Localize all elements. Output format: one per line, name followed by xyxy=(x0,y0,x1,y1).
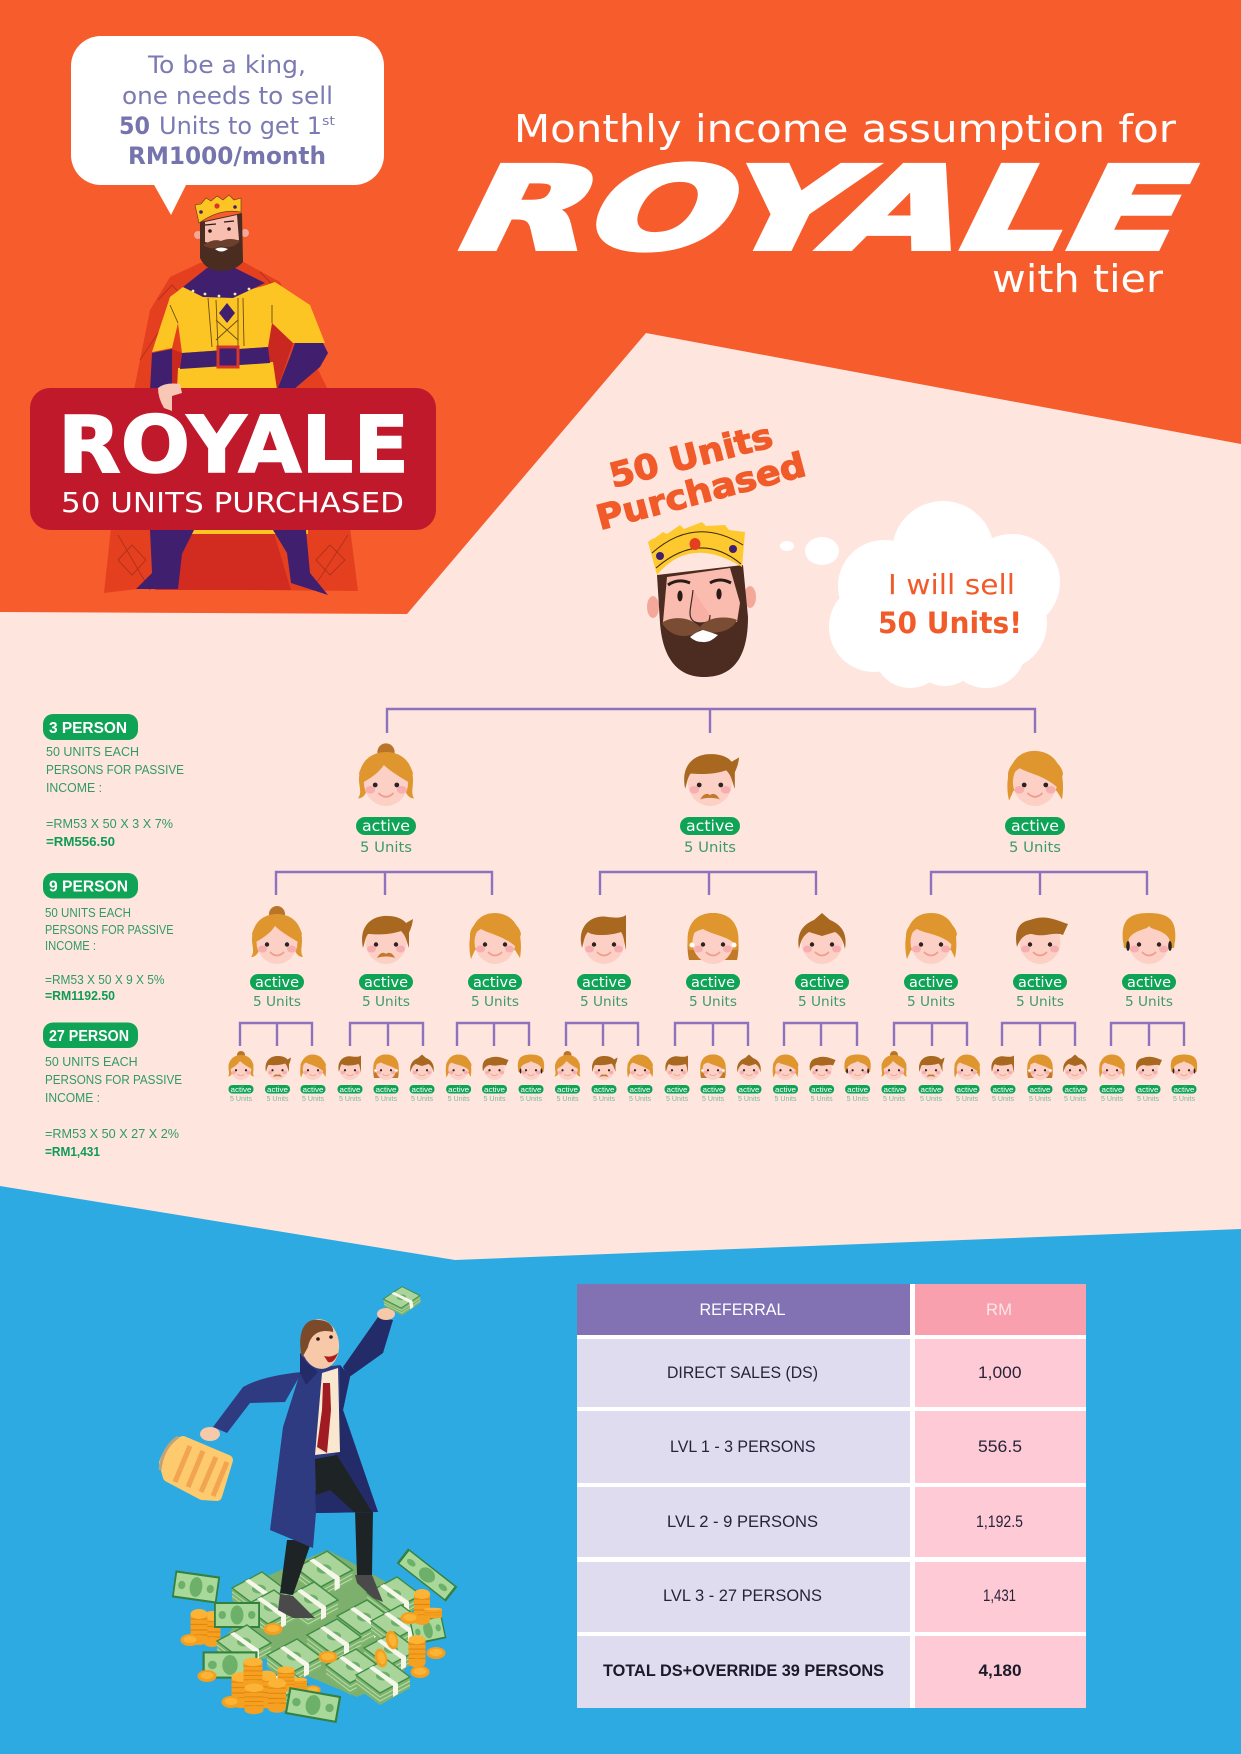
table header: REFERRAL xyxy=(700,1300,786,1319)
person: 5 Units xyxy=(702,1096,724,1103)
person xyxy=(250,906,304,1010)
speech bubble: to be a king: To be a king, xyxy=(147,51,306,79)
illustration: businessman with suitcase xyxy=(160,1285,423,1618)
person xyxy=(1099,1054,1125,1103)
person xyxy=(228,1051,254,1103)
speech bubble: to be a king: Units to get 1 xyxy=(159,112,322,140)
table row: level 3 xyxy=(577,1562,1086,1632)
person: 5 Units xyxy=(666,1096,688,1103)
person: active xyxy=(666,1085,688,1094)
panel: 3 person calculation: =RM53 X 50 X 3 X 7% xyxy=(46,817,173,831)
person: 5 Units xyxy=(484,1096,506,1103)
person: active xyxy=(775,1085,796,1094)
panel: 3 person calculation: 50 UNITS EACH xyxy=(46,745,139,759)
speech bubble: to be a king: 50 xyxy=(119,112,150,140)
person: 5 Units xyxy=(360,840,412,856)
person: active xyxy=(364,975,408,991)
tier 1 people xyxy=(356,743,1065,856)
table row: level 3: 1,431 xyxy=(983,1587,1016,1605)
table row: level 3: LVL 3 - 27 PERSONS xyxy=(663,1587,822,1605)
person: 5 Units xyxy=(1101,1096,1123,1103)
connector lines: tree xyxy=(240,709,1184,1046)
table row: total xyxy=(577,1636,1086,1708)
speech bubble: to be a king: st xyxy=(322,114,335,128)
person: active xyxy=(340,1085,360,1094)
thought cloud: i will sell 50 units xyxy=(780,501,1060,688)
red label: royale 50 units purchased xyxy=(30,388,436,530)
person: active xyxy=(738,1085,760,1094)
person: active xyxy=(811,1085,832,1094)
person: 5 Units xyxy=(448,1096,470,1103)
person: active xyxy=(1018,975,1062,991)
person: 5 Units xyxy=(1173,1096,1195,1103)
speech bubble: to be a king: RM1000/month xyxy=(128,142,326,170)
panel: 9 person calculation: 50 UNITS EACH xyxy=(45,906,131,920)
person xyxy=(338,1056,362,1103)
speech bubble: to be a king xyxy=(71,36,384,215)
person: 5 Units xyxy=(520,1096,542,1103)
title: with tier: with tier xyxy=(992,257,1163,301)
person: active xyxy=(255,975,299,991)
table row: direct sales xyxy=(577,1339,1086,1407)
person: active xyxy=(362,817,410,835)
person: 5 Units xyxy=(920,1096,942,1103)
person xyxy=(1171,1054,1197,1103)
table row: level 2: LVL 2 - 9 PERSONS xyxy=(667,1513,818,1531)
table row: level 2 xyxy=(577,1487,1086,1557)
table header xyxy=(577,1284,1086,1335)
panel: 27 person calculation: 27 PERSON xyxy=(49,1028,129,1045)
person: active xyxy=(473,975,517,991)
panel: 27 person calculation: =RM1,431 xyxy=(45,1145,100,1159)
red label: royale 50 units purchased: ROYALE xyxy=(58,401,409,491)
person: active xyxy=(557,1085,578,1094)
panel: 3 person calculation: 3 PERSON xyxy=(49,720,127,737)
person xyxy=(773,1054,798,1103)
table row: direct sales: DIRECT SALES (DS) xyxy=(667,1364,818,1382)
person: 5 Units xyxy=(593,1096,615,1103)
person: 5 Units xyxy=(956,1096,978,1103)
person xyxy=(300,1054,326,1103)
person xyxy=(736,1054,762,1103)
panel: 27 person calculation: PERSONS FOR PASSIVE xyxy=(45,1073,182,1087)
rotated heading: 50 units purchased: Purchased xyxy=(592,445,810,539)
person xyxy=(918,1056,944,1103)
panel: 9 person calculation: =RM53 X 50 X 9 X 5% xyxy=(45,973,164,987)
person: active xyxy=(1102,1085,1122,1094)
thought cloud: i will sell 50 units: I will sell xyxy=(888,568,1015,601)
person: 5 Units xyxy=(580,994,628,1010)
person: 5 Units xyxy=(798,994,846,1010)
person: active xyxy=(594,1085,614,1094)
person: 5 Units xyxy=(883,1096,905,1103)
person xyxy=(795,913,849,1010)
person xyxy=(680,754,740,856)
speech bubble: to be a king: one needs to sell xyxy=(122,82,333,110)
panel: 27 person calculation: =RM53 X 50 X 27 X 2% xyxy=(45,1127,179,1141)
panel: 9 person calculation: 9 PERSON xyxy=(49,878,128,896)
person: 5 Units xyxy=(811,1096,833,1103)
person: 5 Units xyxy=(1125,994,1173,1010)
person: active xyxy=(412,1085,432,1094)
person: 5 Units xyxy=(1137,1096,1159,1103)
person: active xyxy=(956,1085,978,1094)
tier 2 people xyxy=(250,906,1176,1010)
person: active xyxy=(1174,1085,1194,1094)
person xyxy=(410,1054,434,1103)
person xyxy=(700,1054,726,1103)
person: 5 Units xyxy=(847,1096,869,1103)
person: 5 Units xyxy=(738,1096,760,1103)
table row: level 1: LVL 1 - 3 PERSONS xyxy=(670,1438,816,1456)
person: 5 Units xyxy=(302,1096,324,1103)
person: active xyxy=(582,975,626,991)
person xyxy=(1062,1054,1088,1103)
person xyxy=(373,1054,399,1103)
panel: 27 person calculation: 50 UNITS EACH xyxy=(45,1055,138,1069)
panel: 3 person calculation: =RM556.50 xyxy=(46,835,115,849)
person xyxy=(664,1056,690,1103)
person xyxy=(881,1051,907,1103)
title: royale logo: ROYALE xyxy=(434,144,1220,276)
person: active xyxy=(484,1085,505,1094)
person: active xyxy=(302,1085,324,1094)
background: blue bottom section xyxy=(0,1186,1241,1754)
person: active xyxy=(1011,817,1059,835)
person: 5 Units xyxy=(557,1096,579,1103)
table row: total: TOTAL DS+OVERRIDE 39 PERSONS xyxy=(603,1662,884,1680)
person xyxy=(577,915,631,1010)
person: 5 Units xyxy=(253,994,301,1010)
person: 5 Units xyxy=(375,1096,397,1103)
person xyxy=(468,913,522,1010)
illustration: king standing xyxy=(104,195,358,595)
table: referral income xyxy=(577,1284,1086,1708)
person: active xyxy=(267,1085,288,1094)
person xyxy=(627,1054,653,1103)
person: active xyxy=(1064,1085,1086,1094)
panel: 27 person calculation: INCOME : xyxy=(45,1091,100,1105)
panel: 3 person calculation: PERSONS FOR PASSIVE xyxy=(46,763,184,777)
person: 5 Units xyxy=(992,1096,1014,1103)
person xyxy=(356,743,416,856)
person: 5 Units xyxy=(362,994,410,1010)
red label: royale 50 units purchased: 50 UNITS PURCHASED xyxy=(61,487,404,519)
person xyxy=(554,1051,580,1103)
person: active xyxy=(630,1085,650,1094)
person: active xyxy=(376,1085,396,1094)
person: active xyxy=(992,1085,1014,1094)
person: 5 Units xyxy=(1064,1096,1086,1103)
person: active xyxy=(1138,1085,1158,1094)
table row: direct sales: 1,000 xyxy=(978,1364,1022,1382)
person xyxy=(1027,1054,1053,1103)
person: 5 Units xyxy=(1016,994,1064,1010)
panel: 9 person calculation: =RM1192.50 xyxy=(45,989,115,1003)
person: active xyxy=(909,975,953,991)
person xyxy=(1005,751,1065,856)
illustration: money pile xyxy=(173,1550,456,1722)
person: active xyxy=(847,1085,868,1094)
person: 5 Units xyxy=(775,1096,797,1103)
person xyxy=(446,1054,472,1103)
background: pale pink middle section xyxy=(0,333,1241,1300)
person xyxy=(482,1057,508,1103)
person: 5 Units xyxy=(411,1096,433,1103)
person: 5 Units xyxy=(689,994,737,1010)
person: active xyxy=(800,975,844,991)
person xyxy=(1013,917,1068,1010)
person: active xyxy=(448,1085,469,1094)
person xyxy=(904,913,958,1010)
person: 5 Units xyxy=(230,1096,252,1103)
person xyxy=(518,1054,544,1103)
person xyxy=(1136,1057,1162,1103)
panel: 27 person calculation xyxy=(43,1022,182,1159)
person xyxy=(1122,913,1176,1010)
background: top orange section xyxy=(0,0,1241,640)
panel: 9 person calculation: INCOME : xyxy=(45,939,96,953)
table row: level 1: 556.5 xyxy=(978,1438,1022,1456)
person: active xyxy=(920,1085,942,1094)
person: active xyxy=(230,1085,252,1094)
person xyxy=(592,1056,618,1103)
person: 5 Units xyxy=(1029,1096,1051,1103)
person: active xyxy=(1030,1085,1050,1094)
panel: 3 person calculation xyxy=(43,714,184,849)
person: active xyxy=(686,817,734,835)
table row: level 1 xyxy=(577,1411,1086,1483)
person: 5 Units xyxy=(471,994,519,1010)
person: 5 Units xyxy=(629,1096,651,1103)
thought cloud: i will sell 50 units: 50 Units! xyxy=(878,606,1022,640)
person: 5 Units xyxy=(1009,840,1061,856)
person xyxy=(990,1056,1016,1103)
panel: 9 person calculation xyxy=(43,873,174,1003)
title: monthly income assumption: Monthly income assumption for xyxy=(514,107,1176,151)
icon: king hand over label xyxy=(158,384,182,411)
person: 5 Units xyxy=(267,1096,289,1103)
person xyxy=(809,1057,836,1103)
panel: 3 person calculation: INCOME : xyxy=(46,781,102,795)
illustration: king head with crown xyxy=(647,522,756,677)
person xyxy=(686,913,740,1010)
person: active xyxy=(884,1085,904,1094)
table row: level 2: 1,192.5 xyxy=(976,1513,1023,1531)
panel: 9 person calculation: PERSONS FOR PASSIVE xyxy=(45,923,174,937)
table row: total: 4,180 xyxy=(978,1662,1022,1680)
person: active xyxy=(702,1085,724,1094)
person: 5 Units xyxy=(339,1096,361,1103)
table header: RM xyxy=(986,1300,1012,1319)
person: active xyxy=(691,975,735,991)
tier 3 people xyxy=(228,1051,1197,1103)
person: active xyxy=(520,1085,542,1094)
person xyxy=(954,1054,980,1103)
person: 5 Units xyxy=(684,840,736,856)
person: active xyxy=(1127,975,1171,991)
rotated heading: 50 units purchased: 50 Units xyxy=(605,416,777,497)
person xyxy=(359,916,413,1010)
rotated heading: 50 units purchased xyxy=(592,416,810,539)
person: 5 Units xyxy=(907,994,955,1010)
person xyxy=(844,1054,871,1103)
person xyxy=(265,1056,291,1103)
